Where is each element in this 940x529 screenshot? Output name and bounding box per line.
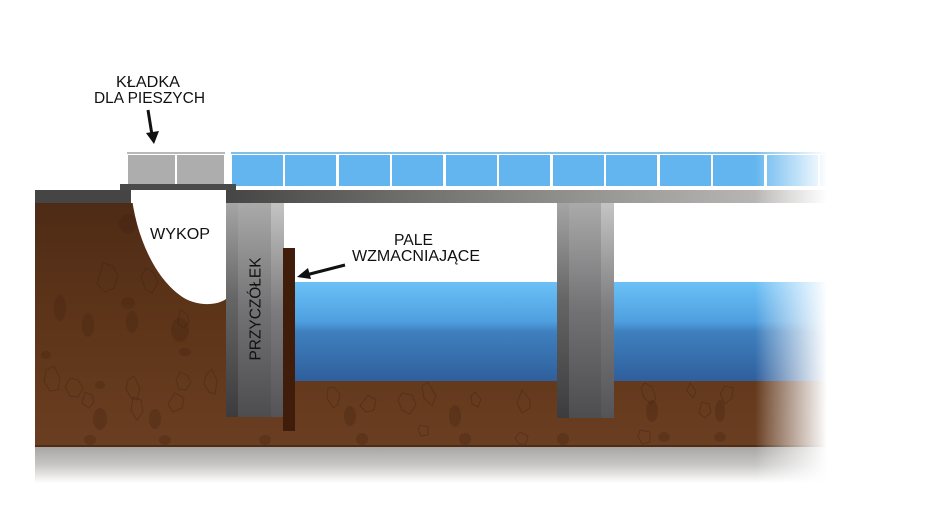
pier (557, 203, 614, 418)
excavation (131, 190, 226, 304)
label: abutment: PRZYCZÓŁEK (246, 257, 264, 360)
soil ground (35, 203, 838, 447)
roadway blue panels (231, 152, 838, 186)
abutment (226, 203, 284, 417)
footbridge (120, 152, 236, 190)
road deck (35, 190, 838, 203)
label: excavation: WYKOP (150, 226, 210, 243)
soil stones (41, 214, 726, 445)
label: reinforcing piles (352, 232, 480, 265)
water (295, 282, 838, 381)
label: footbridge (94, 74, 205, 107)
arrow: reinforcing piles (297, 265, 345, 279)
arrow: footbridge (146, 110, 159, 144)
label: reinforcing piles: PALE (394, 232, 433, 249)
reinforcing pile (283, 248, 295, 431)
ground shadow (35, 447, 838, 483)
label: reinforcing piles: WZMACNIAJĄCE (352, 248, 480, 265)
label: footbridge: DLA PIESZYCH (94, 90, 205, 107)
label: footbridge: KŁADKA (116, 74, 180, 91)
right side fade (755, 145, 840, 490)
